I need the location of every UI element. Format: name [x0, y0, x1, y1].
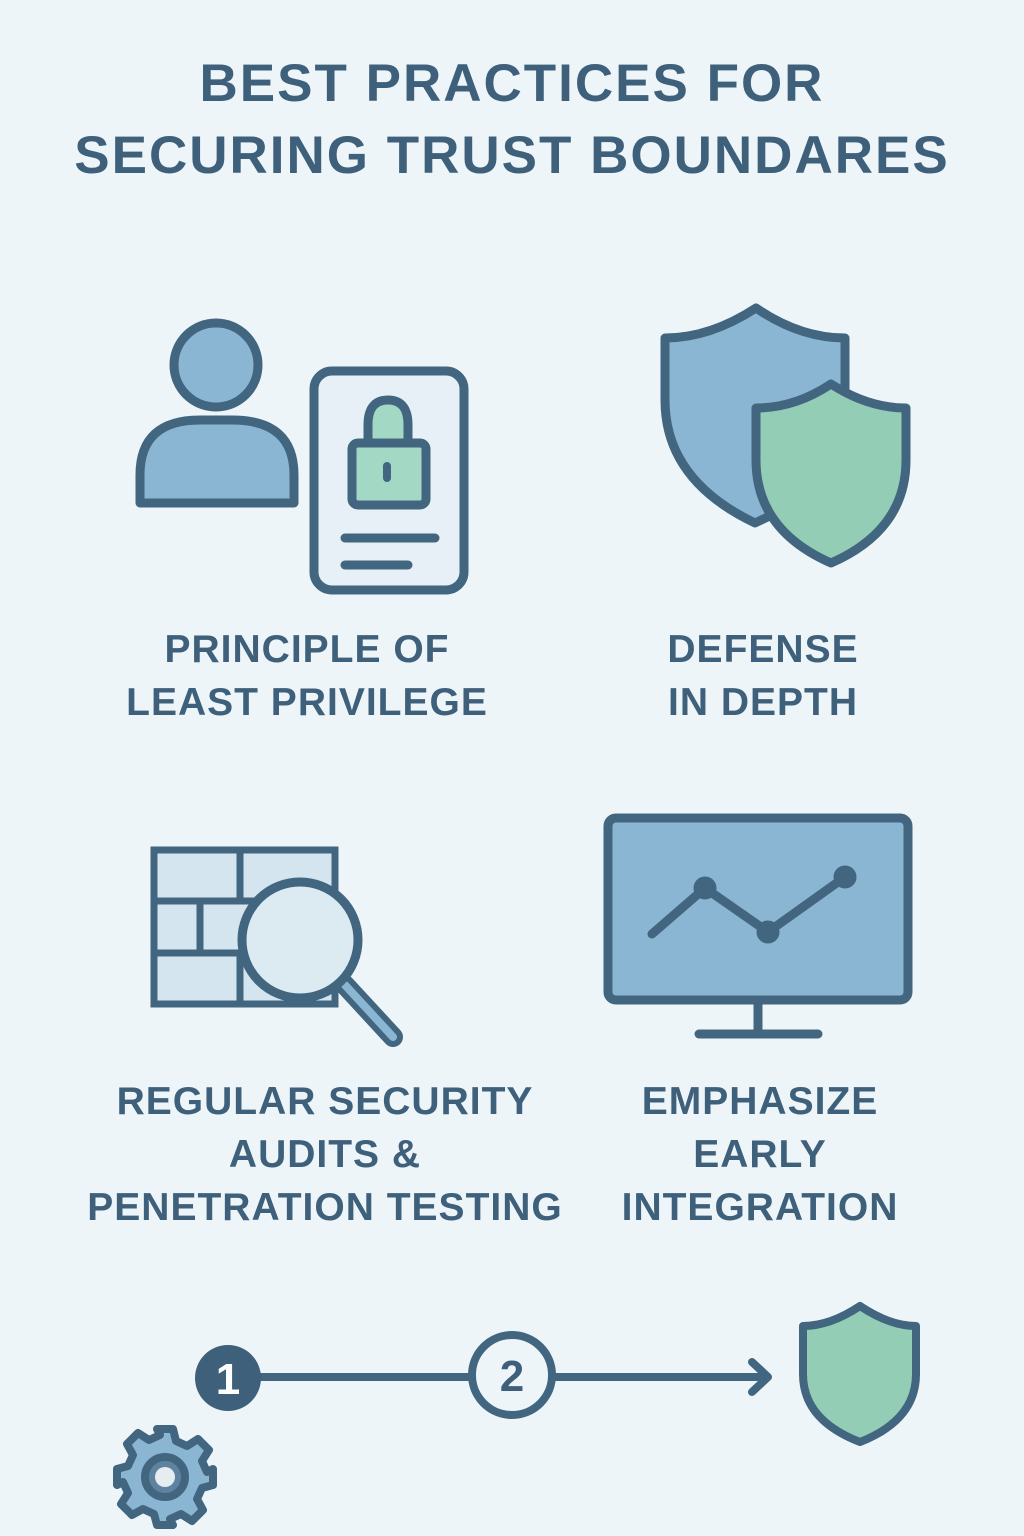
icon: wall with magnifier [154, 850, 393, 1037]
label: defense in depth [667, 628, 859, 724]
process flow: steps to shield: 2 [500, 1352, 524, 1401]
label: defense in depth: DEFENSE [667, 628, 859, 671]
label: early integration [622, 1080, 898, 1229]
label: least privilege [126, 628, 488, 724]
icon: monitor with chart [608, 818, 908, 1034]
label: least privilege: PRINCIPLE OF [164, 628, 450, 671]
icon: gear [117, 1429, 213, 1525]
title: BEST PRACTICES FOR [200, 54, 824, 113]
label: early integration: EARLY [693, 1133, 827, 1176]
label: audits: REGULAR SECURITY [117, 1080, 533, 1123]
label: early integration: INTEGRATION [622, 1186, 898, 1229]
icon: person with locked card [140, 323, 464, 590]
title: SECURING TRUST BOUNDARES [74, 126, 950, 185]
process flow: steps to shield [195, 1306, 916, 1442]
title [74, 54, 950, 185]
label: least privilege: LEAST PRIVILEGE [126, 681, 488, 724]
process flow: steps to shield: 1 [216, 1355, 240, 1404]
label: audits [87, 1080, 563, 1229]
icon: layered shields [665, 308, 906, 563]
label: audits: AUDITS & [229, 1133, 421, 1176]
label: early integration: EMPHASIZE [642, 1080, 878, 1123]
label: defense in depth: IN DEPTH [668, 681, 858, 724]
label: audits: PENETRATION TESTING [87, 1186, 563, 1229]
